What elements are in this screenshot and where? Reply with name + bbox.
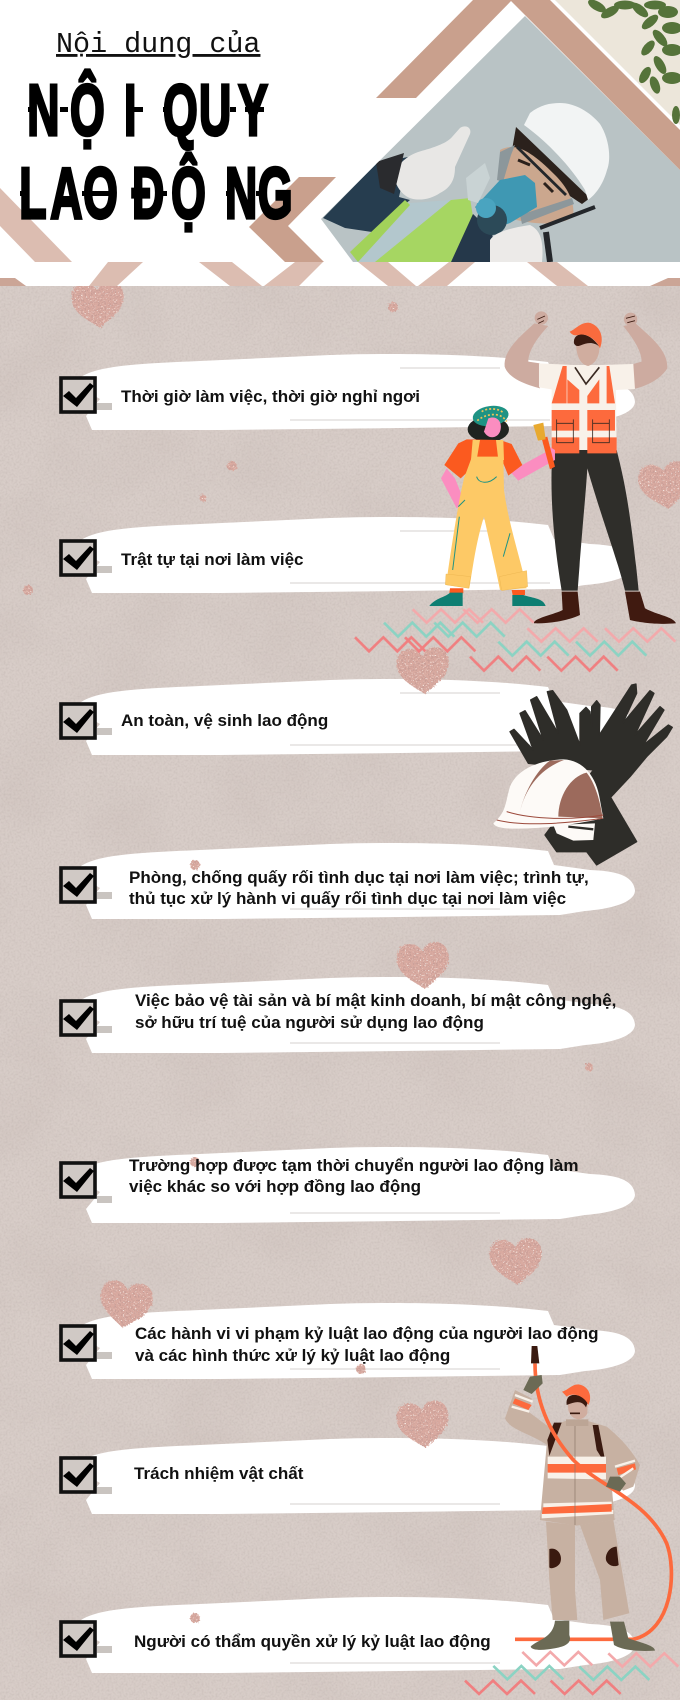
title line 1: NỘI QUY: [27, 70, 268, 151]
helmet: [524, 103, 609, 200]
checkbox 8: [61, 1458, 95, 1492]
checkbox 3: [61, 704, 95, 738]
mask: [475, 175, 537, 224]
illustration: black gloves and hard hat: [493, 684, 672, 865]
illustration: woman in yellow overalls with wrench: [429, 404, 555, 606]
header: wall and foliage: [555, 0, 680, 125]
checkbox 7: [61, 1326, 95, 1360]
shirt: [355, 200, 451, 262]
illustration: zigzags under workers: [355, 609, 675, 671]
brush stroke row 5: [74, 977, 635, 1053]
subtitle: Nội dung của: [56, 28, 260, 61]
title line 2: LAO ĐỘNG: [19, 153, 293, 234]
brush stroke row 9: [74, 1597, 635, 1673]
brush stroke row 8: [74, 1438, 635, 1514]
illustration: zigzags under firefighter: [465, 1652, 678, 1694]
checkbox 4: [61, 868, 95, 902]
header: chevron band: [0, 262, 680, 286]
hose: [515, 1363, 671, 1639]
text row 4: Phòng, chống quấy rối tình dục tại nơi làm việc; trình tự,: [129, 868, 589, 887]
text row 6: [129, 1156, 579, 1196]
text row 7: và các hình thức xử lý kỷ luật lao động: [135, 1346, 450, 1365]
eyes: [518, 160, 553, 192]
face: [500, 147, 573, 224]
brush stroke row 3: [74, 679, 635, 755]
checkbox 9: [61, 1622, 95, 1656]
brush stroke row 6: [74, 1147, 635, 1223]
text row 8: Trách nhiệm vật chất: [134, 1464, 304, 1483]
left glove: [395, 126, 470, 200]
text row 4: [129, 868, 589, 908]
radio: [540, 207, 595, 228]
glitter hearts and dots: [23, 280, 680, 1623]
text row 7: [135, 1324, 599, 1365]
dark shirt: [451, 214, 496, 262]
text row 6: việc khác so với hợp đồng lao động: [129, 1177, 421, 1196]
text row 7: Các hành vi vi phạm kỷ luật lao động của người lao động: [135, 1324, 599, 1343]
right glove: [490, 225, 542, 262]
text row 9: Người có thẩm quyền xử lý kỷ luật lao động: [134, 1632, 491, 1651]
hair: [512, 127, 590, 204]
mask strap: [520, 198, 574, 224]
text row 4: thủ tục xử lý hành vi quấy rối tình dục tại nơi làm việc: [129, 889, 566, 908]
brush stroke row 4: [74, 843, 635, 919]
text row 3: An toàn, vệ sinh lao động: [121, 711, 328, 730]
checkbox 1: [61, 378, 95, 412]
brush stroke row 2: [74, 517, 635, 593]
checkbox 5: [61, 1001, 95, 1035]
jacket: [323, 157, 410, 232]
text row 5: Việc bảo vệ tài sản và bí mật kinh doanh, bí mật công nghệ,: [135, 991, 616, 1010]
text row 5: [135, 991, 616, 1032]
text row 6: Trường hợp được tạm thời chuyển người lao động làm: [129, 1156, 579, 1175]
header: photo of worker with respirator: [320, 10, 680, 270]
checkbox 6: [61, 1163, 95, 1197]
checkbox 2: [61, 541, 95, 575]
illustration: tall male worker with orange vest: [505, 311, 676, 624]
brush stroke row 1: [74, 354, 635, 430]
text row 2: Trật tự tại nơi làm việc: [121, 550, 304, 569]
vest: [350, 200, 410, 262]
text row 5: sở hữu trí tuệ của người sử dụng lao động: [135, 1013, 484, 1032]
filter shell: [466, 163, 490, 203]
brush stroke row 7: [74, 1303, 635, 1379]
watch band: [376, 153, 404, 194]
illustration: firefighter holding hose: [505, 1346, 671, 1651]
header: white panel: [0, 0, 680, 262]
goggles band: [516, 146, 567, 196]
header: roof chevrons: [0, 0, 680, 262]
text row 1: Thời giờ làm việc, thời giờ nghỉ ngơi: [121, 387, 420, 406]
